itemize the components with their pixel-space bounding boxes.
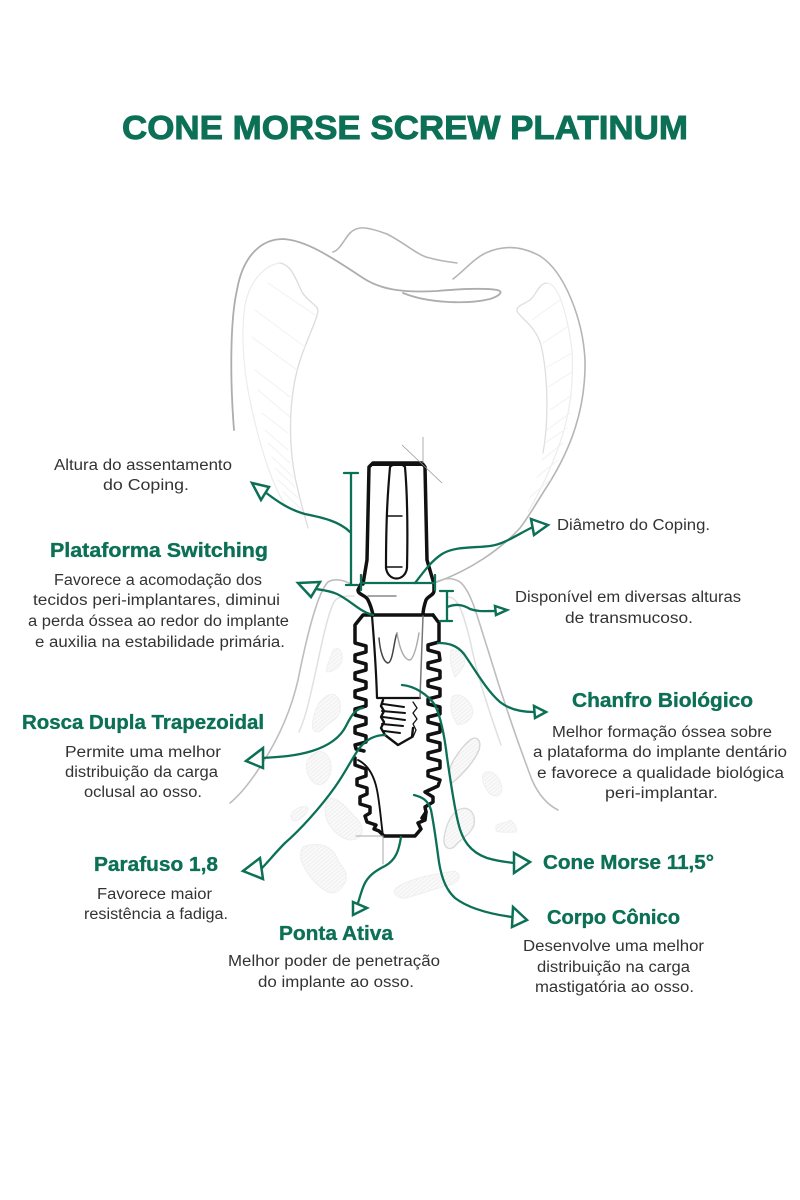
screw thread xyxy=(381,700,413,745)
implant body threads xyxy=(355,615,433,751)
arrow: Altura do assentamento xyxy=(252,473,358,585)
heading: Rosca Dupla Trapezoidal: Rosca Dupla Trapezoidal xyxy=(22,712,264,734)
illustration: gum and bone xyxy=(230,579,558,898)
text: Altura do assentamento: Altura do assentamento xyxy=(54,457,232,474)
text: Corpo Cônico: Desenvolve uma melhor xyxy=(523,938,704,955)
arrow: Cone Morse xyxy=(402,685,530,873)
arrow: Parafuso 1,8 xyxy=(243,735,385,879)
text: Plataforma Switching: tecidos peri-implantares, diminui xyxy=(33,592,280,609)
heading: Ponta Ativa: Ponta Ativa xyxy=(279,923,394,945)
arrow: Chanfro Biológico xyxy=(438,643,546,718)
heading: Plataforma Switching: Plataforma Switching xyxy=(50,540,268,562)
heading: Parafuso 1,8: Parafuso 1,8 xyxy=(94,854,218,876)
text: Chanfro Biológico: peri-implantar. xyxy=(605,785,718,802)
text: Ponta Ativa xyxy=(228,953,440,991)
title: CONE MORSE SCREW PLATINUM xyxy=(122,109,688,146)
text: Diâmetro do Coping: Diâmetro do Coping. xyxy=(557,517,710,534)
arrow: Corpo Cônico xyxy=(414,795,527,927)
arrow: transmucoso xyxy=(440,591,507,621)
inner body line xyxy=(358,760,383,836)
text: Parafuso 1,8 xyxy=(84,886,228,923)
internal bore xyxy=(372,616,420,698)
text: Rosca Dupla Trapezoidal xyxy=(65,744,221,801)
text: Chanfro Biológico: Melhor formação óssea sobre xyxy=(552,724,772,741)
text: Plataforma Switching: e auxilia na estabilidade primária. xyxy=(35,634,285,651)
text: Rosca Dupla Trapezoidal: oclusal ao osso. xyxy=(84,784,202,801)
text: Plataforma Switching: a perda óssea ao redor do implante xyxy=(28,613,289,630)
arrow: Ponta Ativa xyxy=(353,837,401,915)
text: transmucoso: de transmucoso. xyxy=(565,610,693,627)
arrow: Rosca Dupla Trapezoidal xyxy=(246,708,363,768)
text: Corpo Cônico: mastigatória ao osso. xyxy=(535,979,694,996)
text: Parafuso 1,8: resistência a fadiga. xyxy=(84,906,228,923)
text: Corpo Cônico: distribuição na carga xyxy=(537,959,690,976)
text: Rosca Dupla Trapezoidal: Permite uma melhor xyxy=(65,744,221,761)
text: Corpo Cônico xyxy=(523,938,704,996)
text: Chanfro Biológico: e favorece a qualidade biológica xyxy=(537,765,784,782)
text: Altura do assentamento: do Coping. xyxy=(103,477,189,494)
bone blobs xyxy=(291,649,517,898)
text: Parafuso 1,8: Favorece maior xyxy=(97,886,212,903)
text: Chanfro Biológico xyxy=(533,724,787,802)
decorative guide lines xyxy=(402,437,442,483)
illustration: tooth crown xyxy=(231,228,585,582)
text: Altura do assentamento xyxy=(54,457,232,494)
heading: Cone Morse: Cone Morse 11,5° xyxy=(543,852,714,874)
text: Rosca Dupla Trapezoidal: distribuição da carga xyxy=(65,764,218,781)
text: Plataforma Switching: Favorece a acomodação dos xyxy=(54,572,262,589)
heading: Corpo Cônico: Corpo Cônico xyxy=(547,907,680,929)
text: Ponta Ativa: Melhor poder de penetração xyxy=(228,953,440,970)
text: Chanfro Biológico: a plataforma do implante dentário xyxy=(533,744,787,761)
text: Ponta Ativa: do implante ao osso. xyxy=(258,974,414,991)
heading: Chanfro Biológico: Chanfro Biológico xyxy=(572,690,753,712)
illustration: implant xyxy=(355,463,440,864)
collar xyxy=(358,584,434,615)
arrow: Diâmetro do Coping xyxy=(361,519,548,590)
abutment xyxy=(363,463,434,584)
text: Plataforma Switching xyxy=(28,572,289,651)
text: transmucoso xyxy=(515,589,741,627)
arrow: Plataforma Switching xyxy=(298,582,373,615)
text: transmucoso: Disponível em diversas alturas xyxy=(515,589,741,606)
